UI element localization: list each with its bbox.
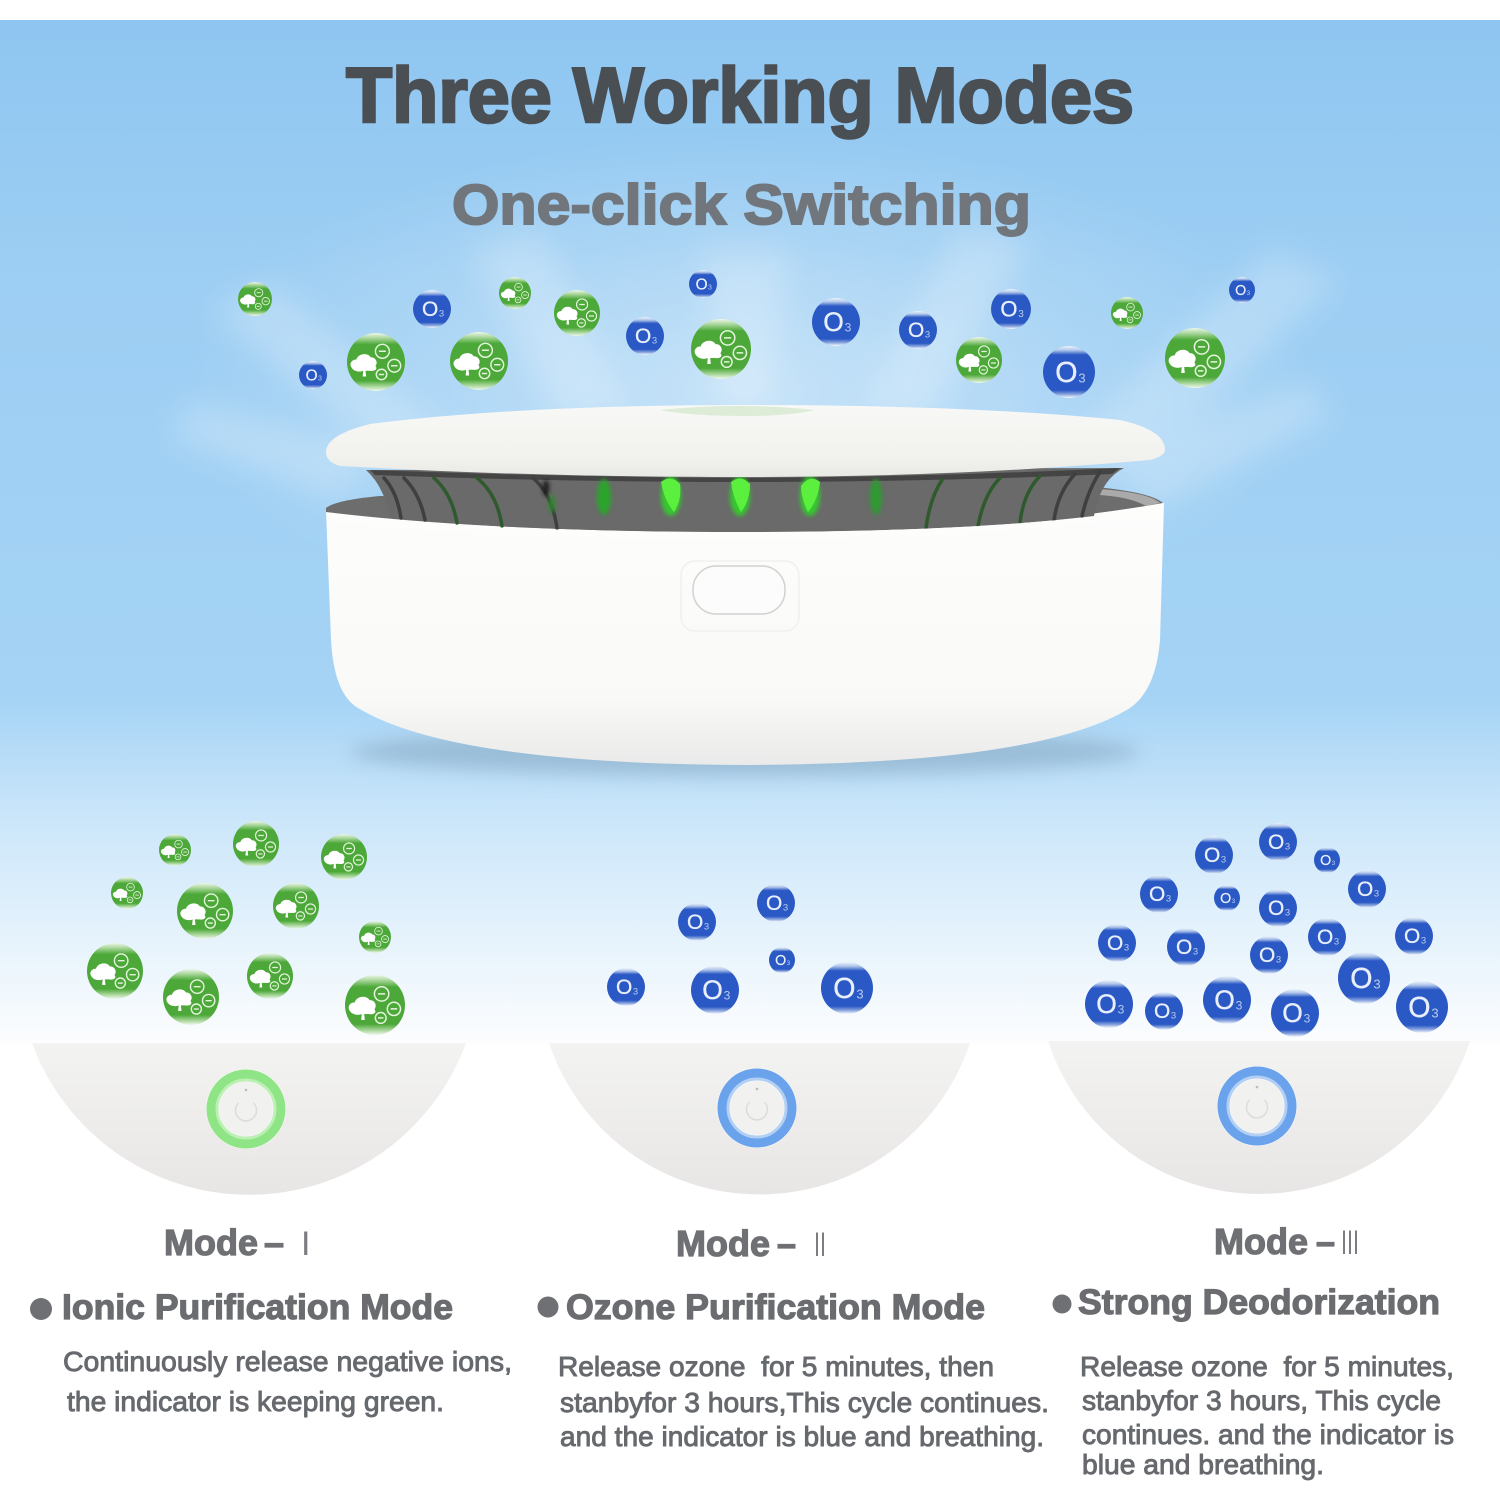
icon: mode 3 ozone bubbles: O: [1204, 844, 1220, 867]
indicator ring blue: [717, 1068, 797, 1148]
icon: mode 3 ozone bubbles: 3: [1118, 1003, 1125, 1017]
description: and the indicator is blue and breathing.: [560, 1421, 1044, 1452]
icon: mode 3 ozone bubbles: 3: [1421, 936, 1426, 947]
icon: mode 3 ozone bubbles: O: [1404, 925, 1420, 948]
icon: ozone bubbles: 3: [1078, 370, 1086, 385]
description: Release ozone for 5 minutes, then: [558, 1351, 994, 1382]
icon: ozone bubbles: O: [306, 367, 318, 384]
indicator ring blue: [1217, 1066, 1297, 1146]
icon: mode 2 ozone bubbles: O: [616, 976, 632, 999]
icon: mode 3 ozone bubbles: 3: [1304, 1012, 1311, 1026]
icon: mode 3 ozone bubbles: O: [1350, 963, 1372, 995]
icon: ozone bubbles: O: [422, 298, 438, 321]
indicator ring green: [206, 1069, 286, 1149]
icon: mode 3 ozone bubbles: 3: [1285, 842, 1290, 853]
icon: mode 3 ozone bubbles: 3: [1332, 860, 1336, 867]
icon: mode 3 ozone bubbles: 3: [1221, 855, 1226, 866]
icon: mode 2 ozone bubbles: 3: [787, 960, 791, 967]
heading: mode 2: II: [814, 1226, 826, 1264]
icon: ozone bubbles: O: [635, 325, 651, 348]
vent slats: [384, 472, 1100, 528]
inner rim highlight: [1100, 489, 1160, 506]
icon: mode 2 ozone bubbles: 3: [704, 922, 709, 933]
floating ion and ozone bubbles: [238, 270, 1255, 398]
heading: mode 3: III: [1341, 1224, 1359, 1262]
description: [1080, 1351, 1454, 1480]
panel: mode 2 illustration: [549, 884, 970, 1194]
icon: mode 2 ozone bubbles: 3: [783, 903, 788, 914]
icon: mode 3 ozone bubbles: 3: [1171, 1011, 1176, 1022]
device top semicircle: [1048, 1041, 1470, 1194]
icon: mode 2 ozone bubbles: [607, 884, 873, 1014]
icon: mode 2 ozone bubbles: 3: [633, 987, 638, 998]
heading: mode 3: Mode: [1214, 1221, 1308, 1262]
icon: ozone bubbles: 3: [1018, 309, 1024, 320]
description: blue and breathing.: [1082, 1449, 1324, 1480]
icon: mode 3 ozone bubbles: O: [1149, 883, 1165, 906]
icon: mode 3 ozone bubbles: O: [1107, 932, 1123, 955]
icon: negative ion bubbles: [238, 277, 1225, 391]
grey vent band: [366, 468, 1124, 532]
icon: mode 3 ozone bubbles: O: [1176, 936, 1192, 959]
bullet: [538, 1296, 558, 1318]
icon: mode 3 ozone bubbles: O: [1357, 878, 1373, 901]
icon: mode 3 ozone bubbles: O: [1214, 985, 1235, 1015]
heading: mode 3: [1214, 1221, 1359, 1262]
panel: mode 1 illustration: [32, 821, 466, 1195]
heading: mode 1: –: [264, 1222, 284, 1263]
icon: ozone bubbles: 3: [439, 309, 444, 320]
icon: mode 2 ozone bubbles: O: [702, 975, 723, 1005]
green LED slots: [543, 476, 882, 516]
side button: [681, 561, 799, 631]
icon: mode 3 ozone bubbles: 3: [1285, 908, 1290, 919]
description: stanbyfor 3 hours,This cycle continues.: [560, 1387, 1049, 1418]
icon: mode 3 ozone bubbles: O: [1268, 897, 1284, 920]
icon: mode 3 ozone bubbles: O: [1320, 853, 1331, 869]
text block: mode 2: [538, 1223, 1049, 1452]
heading: mode 3: –: [1316, 1221, 1335, 1262]
subtitle: One-click Switching: [452, 173, 1031, 237]
icon: mode 3 ozone bubbles: 3: [1193, 947, 1198, 958]
heading: mode 2: Mode: [676, 1223, 770, 1264]
light rays behind device: [170, 225, 1340, 510]
icon: mode 3 ozone bubbles: O: [1220, 891, 1231, 907]
icon: mode 3 ozone bubbles: 3: [1373, 976, 1381, 991]
icon: mode 3 ozone bubbles: O: [1282, 998, 1303, 1028]
text block: mode 1: [30, 1222, 512, 1417]
description: Release ozone for 5 minutes,: [1080, 1351, 1454, 1382]
icon: mode 3 ozone bubbles: 3: [1276, 955, 1281, 966]
subheading: ionic purification: Ionic Purification Mode: [62, 1288, 453, 1327]
device top semicircle: [549, 1043, 970, 1194]
icon: ozone bubbles: 3: [1247, 290, 1251, 297]
description: Continuously release negative ions,: [63, 1346, 512, 1377]
icon: mode 3 ozone bubbles: O: [1154, 1000, 1170, 1023]
device top semicircle: [32, 1043, 466, 1195]
heading: mode 1: [164, 1222, 310, 1263]
icon: mode 3 ozone bubbles: O: [1268, 831, 1284, 854]
icon: ozone bubbles: 3: [318, 376, 322, 383]
icon: ozone bubbles: 3: [652, 336, 657, 347]
bullet: [1052, 1294, 1072, 1314]
icon: mode 3 ozone bubbles: O: [1096, 989, 1117, 1019]
icon: mode 3 ozone bubbles: 3: [1232, 898, 1236, 905]
icon: ozone bubbles: O: [696, 276, 708, 293]
icon: mode 3 ozone bubbles: 3: [1166, 894, 1171, 905]
icon: mode 3 ozone bubbles: 3: [1431, 1005, 1439, 1020]
heading: mode 1: I: [301, 1225, 310, 1263]
description: stanbyfor 3 hours, This cycle: [1082, 1385, 1441, 1416]
icon: ozone bubbles: O: [1055, 357, 1077, 389]
icon: ozone bubbles: 3: [708, 285, 712, 292]
icon: mode 3 ozone bubbles: 3: [1124, 943, 1129, 954]
icon: mode 2 ozone bubbles: 3: [856, 986, 864, 1001]
heading: mode 1: Mode: [164, 1222, 258, 1263]
icon: mode 3 ozone bubbles: O: [1317, 926, 1333, 949]
icon: ozone bubbles: [299, 270, 1255, 398]
band top shadow: [370, 468, 1120, 482]
icon: mode 3 ozone bubbles: 3: [1334, 937, 1339, 948]
icon: ozone bubbles: 3: [925, 330, 930, 341]
icon: ozone bubbles: O: [1235, 283, 1246, 299]
subheading: ozone purification: Ozone Purification Mode: [566, 1288, 985, 1327]
icon: mode 3 ozone bubbles: [1085, 823, 1448, 1037]
inner rim: [326, 487, 1163, 532]
icon: ozone bubbles: O: [1000, 297, 1018, 322]
description: the indicator is keeping green.: [67, 1386, 444, 1417]
icon: mode 3 ozone bubbles: O: [1408, 992, 1430, 1024]
text block: mode 3: [1052, 1221, 1454, 1480]
body front edge: [332, 503, 1163, 540]
icon: ozone bubbles: 3: [845, 321, 852, 335]
icon: mode 2 ozone bubbles: O: [766, 892, 782, 915]
heading: mode 2: [676, 1223, 826, 1264]
icon: ozone bubbles: O: [823, 307, 844, 337]
subheading: strong deodorization: Strong Deodorization: [1078, 1283, 1440, 1322]
description: [63, 1346, 512, 1417]
icon: mode 2 ozone bubbles: O: [775, 953, 786, 969]
bullet: [30, 1298, 52, 1320]
icon: mode 3 ozone bubbles: 3: [1374, 889, 1379, 900]
icon: mode 2 ozone bubbles: O: [833, 973, 855, 1005]
icon: mode 2 ozone bubbles: 3: [724, 989, 731, 1003]
air purifier device: [326, 405, 1165, 776]
device shadow: [350, 728, 1140, 776]
icon: mode 1 ion bubbles: [87, 821, 405, 1035]
icon: mode 3 ozone bubbles: 3: [1236, 999, 1243, 1013]
lid power button glow: [660, 406, 815, 416]
title: Three Working Modes: [346, 51, 1134, 139]
icon: mode 3 ozone bubbles: O: [1259, 944, 1275, 967]
lid: [326, 405, 1165, 477]
description: continues. and the indicator is: [1082, 1419, 1454, 1450]
heading: mode 2: –: [777, 1223, 796, 1264]
lower body: [326, 503, 1164, 765]
icon: mode 2 ozone bubbles: O: [687, 911, 703, 934]
panel: mode 3 illustration: [1048, 823, 1470, 1194]
icon: ozone bubbles: O: [908, 319, 924, 342]
description: [558, 1351, 1049, 1452]
